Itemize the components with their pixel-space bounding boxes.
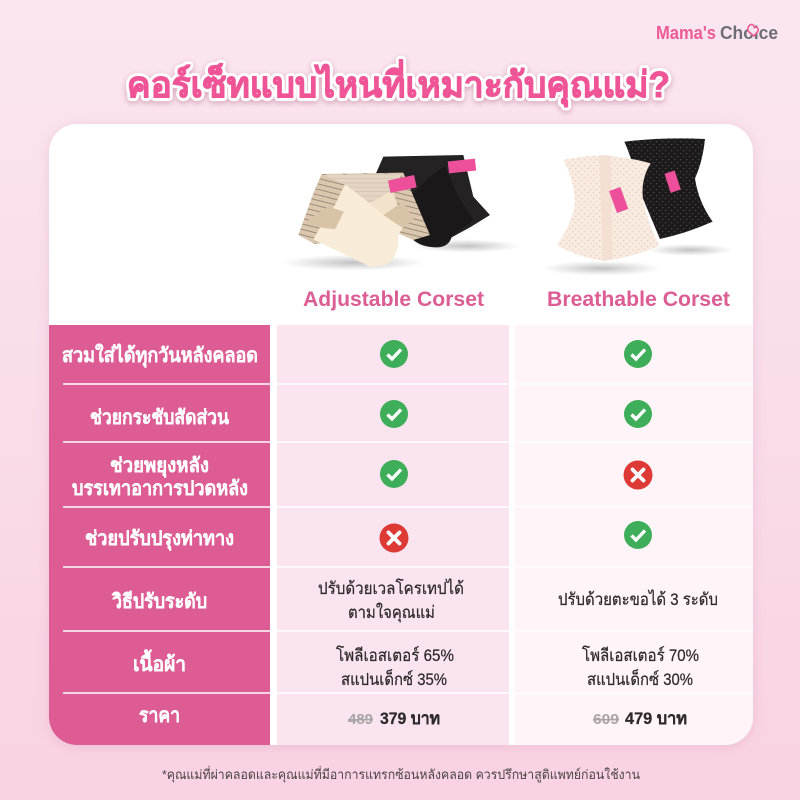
product: breathable corset [542,138,733,276]
adjustment text, adjustable: ปรับด้วยเวลโครเทปได้ [318,578,464,598]
fabric, adjustable: โพลีเอสเตอร์ 65% [336,645,454,665]
icon: check, back support, adjustable [380,460,408,488]
price, breathable: 609 [593,711,619,728]
fabric, adjustable [336,645,454,689]
icon: check, wear daily, breathable [624,340,652,368]
icon: check, firming, breathable [624,400,652,428]
price, adjustable [348,709,440,728]
row labels: ราคา [139,705,180,727]
icon: check, wear daily, adjustable [380,340,408,368]
icon: check, firming, adjustable [380,400,408,428]
fabric, breathable [582,645,699,689]
adjustable column [277,325,509,745]
breathable column [515,325,753,745]
row labels: วิธีปรับระดับ [111,590,207,613]
fabric, breathable: โพลีเอสเตอร์ 70% [582,645,699,665]
row labels [62,343,258,727]
label column [49,325,270,745]
price, breathable: 479 บาท [625,709,687,728]
price, breathable [593,709,687,728]
logo: Choice [720,23,778,43]
row labels: บรรเทาอาการปวดหลัง [72,478,248,500]
logo: Mama's [656,23,716,43]
title: คอร์เซ็ทแบบไหนที่เหมาะกับคุณแม่? [127,59,670,108]
heading: Adjustable Corset: Adjustable Corset [303,288,484,311]
adjustment text, breathable: ปรับด้วยตะขอได้ 3 ระดับ [558,589,718,609]
icon: cross, back support, breathable [624,460,652,490]
row labels: เนื้อผ้า [133,649,186,676]
heading: Breathable Corset: Breathable Corset [547,288,730,311]
fabric, breathable: สแปนเด็กซ์ 30% [587,668,693,689]
adjustment text, adjustable [318,578,464,623]
icon: check, posture, breathable [624,521,652,549]
price, adjustable: 379 บาท [380,709,440,728]
icon: cross, posture, adjustable [380,524,408,552]
adjustment text, adjustable: ตามใจคุณแม่ [348,602,435,623]
fabric, adjustable: สแปนเด็กซ์ 35% [341,668,447,689]
comparison table card [49,124,753,745]
row dividers [63,384,753,693]
title: คอร์เซ็ทแบบไหนที่เหมาะกับคุณแม่? [127,59,670,108]
logo [656,23,778,43]
footnote: *คุณแม่ที่ผ่าคลอดและคุณแม่ที่มีอาการแทรกซ้อนหลังคลอด ควรปรึกษาสูติแพทย์ก่อนใช้งาน [162,766,640,783]
row labels: ช่วยพยุงหลัง [110,455,209,478]
row labels: ช่วยกระชับสัดส่วน [90,407,229,429]
row labels: สวมใส่ได้ทุกวันหลังคลอด [62,343,258,368]
product: adjustable corset [282,155,520,271]
row labels: ช่วยปรับปรุงท่าทาง [85,528,234,551]
price, adjustable: 489 [348,711,373,728]
